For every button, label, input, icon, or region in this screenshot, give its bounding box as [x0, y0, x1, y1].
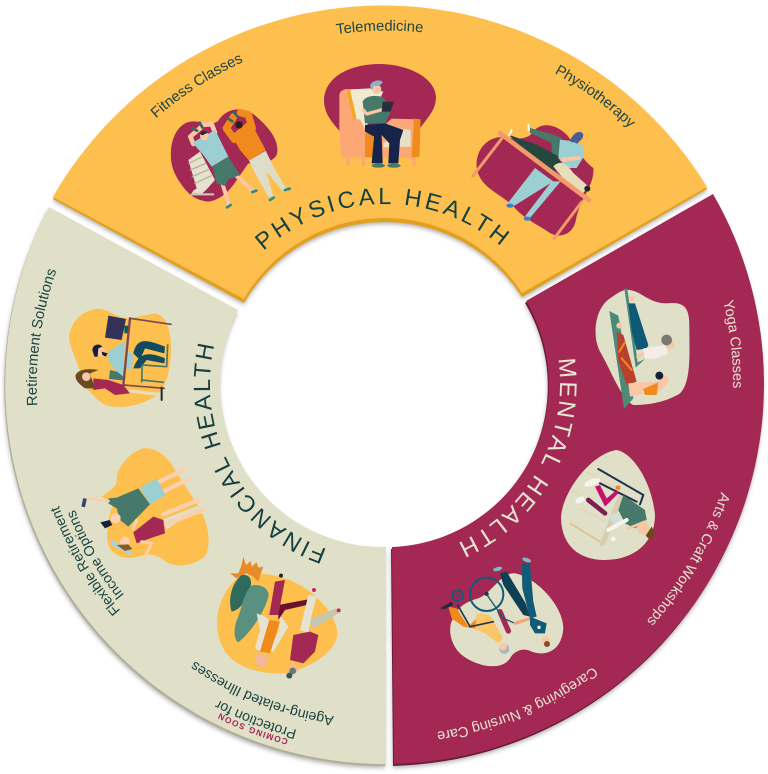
- illustration: yoga: [596, 288, 690, 409]
- label: fitness classes: Fitness Classes: [150, 56, 242, 118]
- heading: physical health: PHYSICAL HEALTH: [254, 188, 510, 250]
- illustration: protection: [217, 557, 341, 679]
- illustration: physiotherapy: [473, 125, 593, 239]
- label: telemedicine: Telemedicine: [336, 20, 423, 34]
- label: caregiving and nursing care: Caregiving & Nursing Care: [438, 668, 597, 740]
- panel: physical health: [52, 6, 708, 306]
- illustration: arts and crafts: [561, 450, 655, 560]
- illustration: caregiving: [440, 557, 563, 666]
- label: flexible retirement income options: Income Options: [68, 510, 124, 600]
- illustration: retirement solutions: [69, 309, 171, 407]
- label: protection for ageing-related illnesses: Ageing-related Illnesses: [192, 662, 334, 726]
- label: retirement solutions: Retirement Solutions: [26, 269, 56, 406]
- label: flexible retirement income options: Flexible Retirement: [50, 506, 120, 616]
- label: arts and craft workshops: Arts & Craft Workshops: [648, 492, 730, 625]
- illustration: fitness classes: [171, 109, 290, 207]
- illustration: flexible retirement: [81, 448, 209, 565]
- heading: mental health: MENTAL HEALTH: [460, 359, 577, 558]
- illustration: telemedicine: [324, 64, 436, 168]
- panel: mental health: [388, 194, 766, 770]
- label: protection for ageing-related illnesses: Protection for: [215, 700, 296, 739]
- heading: financial health: FINANCIAL HEALTH: [194, 344, 326, 564]
- panel: financial health: [2, 207, 388, 770]
- label: coming soon: COMING SOON: [218, 713, 288, 744]
- label: physiotherapy: Physiotherapy: [556, 64, 635, 127]
- label: yoga classes: Yoga Classes: [724, 300, 742, 388]
